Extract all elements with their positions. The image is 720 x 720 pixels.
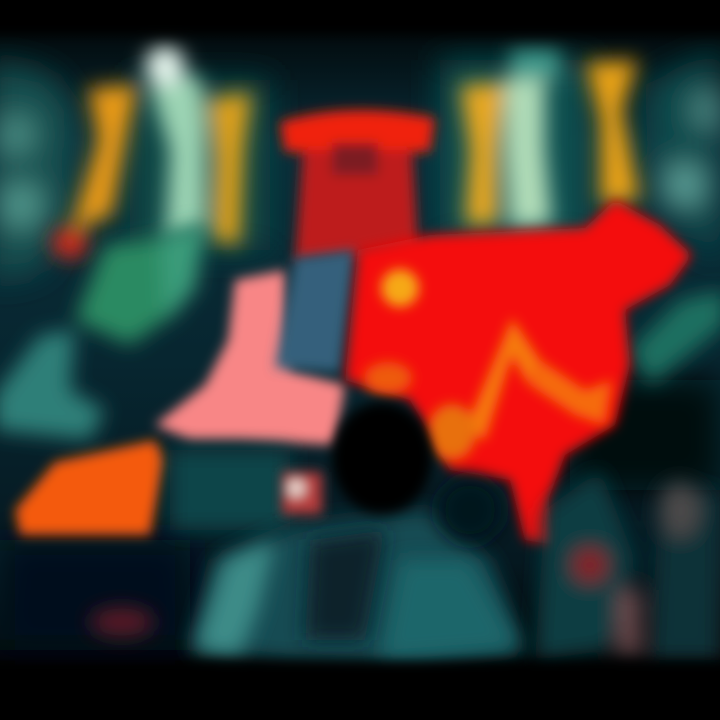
tower cap: teal right bbox=[510, 50, 560, 80]
building: far right teal bbox=[645, 50, 720, 260]
tower base: red left bbox=[52, 227, 88, 259]
dark teal panel bbox=[170, 450, 290, 530]
tower: pale green bbox=[150, 75, 205, 240]
map: orange region bbox=[15, 440, 165, 535]
red smudge bottom-left bbox=[90, 608, 154, 636]
figure: head bbox=[332, 402, 432, 514]
upper green streak bbox=[160, 225, 205, 320]
group: towers bbox=[52, 46, 640, 259]
top dark band bbox=[0, 0, 720, 35]
person: muted red bbox=[574, 549, 606, 581]
map: red China shape bbox=[345, 200, 692, 545]
orange zigzag right bbox=[530, 360, 612, 425]
tower roof bbox=[280, 110, 435, 152]
right dark area bbox=[570, 380, 720, 490]
small icon: white red flag bbox=[282, 472, 322, 514]
orange lower bbox=[428, 404, 476, 460]
tower door bbox=[332, 143, 378, 175]
building: right mid bbox=[440, 60, 590, 240]
person: dark head bbox=[438, 478, 502, 542]
group: lower dark forms bbox=[90, 450, 290, 636]
building: left mid dark bbox=[130, 80, 270, 250]
figure group bbox=[190, 402, 525, 665]
map: pink region bbox=[155, 270, 345, 445]
orange zigzag left bbox=[465, 318, 540, 440]
orange spot bbox=[364, 362, 412, 394]
map accents bbox=[364, 269, 612, 460]
tower body bbox=[295, 150, 418, 262]
window dots: left bbox=[0, 119, 40, 225]
figure: dark center bbox=[305, 530, 385, 640]
lower left dark bbox=[0, 540, 190, 650]
figure: shoulder highlight bbox=[195, 540, 275, 655]
figure: shoulders bbox=[190, 510, 525, 665]
figure: right highlight bbox=[380, 560, 520, 660]
tower: orange left bbox=[70, 84, 138, 232]
person: mauve bbox=[618, 590, 640, 655]
tower top: white bbox=[145, 46, 185, 86]
green left shapes bbox=[0, 225, 720, 440]
person: far right bbox=[650, 490, 720, 660]
star: yellow bbox=[381, 269, 419, 307]
green block bbox=[75, 235, 185, 345]
teal stair bbox=[0, 330, 105, 440]
person: head far right bbox=[660, 482, 700, 538]
tower: orange right bbox=[585, 60, 640, 205]
group: right crowd bbox=[438, 470, 720, 660]
bottom dark band bbox=[0, 662, 720, 720]
right green leaf bbox=[630, 290, 720, 385]
tower: orange third bbox=[460, 82, 505, 225]
building: far left teal bbox=[0, 60, 75, 280]
panel: blue phone bbox=[275, 250, 355, 372]
red central tower bbox=[280, 110, 435, 262]
tower: orange second bbox=[208, 92, 252, 245]
person: teal right bbox=[535, 470, 635, 660]
window dots: right bbox=[667, 97, 720, 203]
tower: pale green right bbox=[505, 70, 552, 228]
